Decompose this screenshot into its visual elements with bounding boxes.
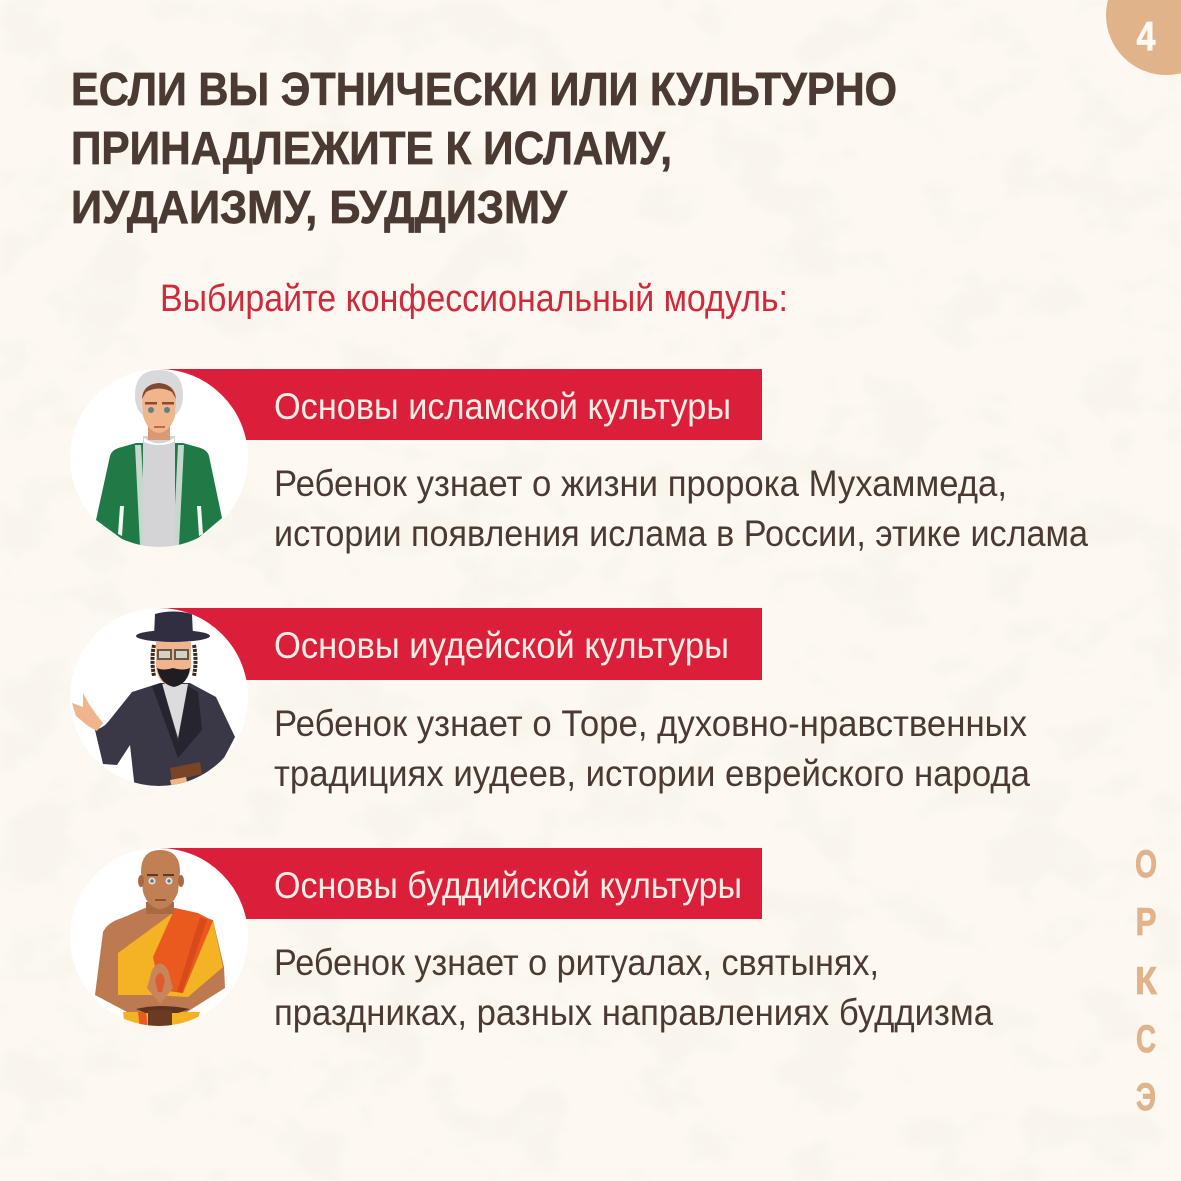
title: ПРИНАДЛЕЖИТЕ К ИСЛАМУ, (71, 122, 672, 174)
panel: islamic culture (70, 369, 1088, 554)
description: jewish culture (274, 703, 1030, 794)
heading bar: buddhist culture (160, 848, 762, 919)
description: islamic culture (274, 463, 1088, 554)
page number badge: 4 (1136, 13, 1156, 59)
heading bar: jewish culture: Основы иудейской культуры (274, 625, 729, 666)
icon: man in turban and green robe (70, 369, 248, 551)
icon: rabbi with hat and book (70, 608, 248, 790)
page number badge (1106, 0, 1181, 75)
vertical label: Р (1136, 901, 1156, 944)
icon: buddhist monk in orange robe (70, 848, 248, 1030)
title (71, 63, 897, 233)
description: jewish culture: Ребенок узнает о Торе, духовно-нравственных (274, 703, 1027, 744)
panel: jewish culture (70, 608, 1030, 794)
heading bar: islamic culture: Основы исламской культуры (274, 386, 731, 427)
heading bar: islamic culture (160, 369, 762, 440)
description: buddhist culture (274, 942, 993, 1033)
vertical label: К (1135, 960, 1157, 1003)
title: ИУДАИЗМУ, БУДДИЗМУ (71, 181, 568, 233)
heading bar: buddhist culture: Основы буддийской культуры (274, 865, 742, 906)
vertical label: С (1136, 1018, 1156, 1061)
description: jewish culture: традициях иудеев, истории еврейского народа (274, 753, 1030, 794)
description: buddhist culture: Ребенок узнает о ритуалах, святынях, (274, 942, 879, 983)
description: islamic culture: Ребенок узнает о жизни пророка Мухаммеда, (274, 463, 1007, 504)
panel: buddhist culture (70, 848, 993, 1033)
vertical label (1135, 843, 1157, 1119)
description: islamic culture: истории появления ислама в России, этике ислама (274, 513, 1088, 554)
heading bar: jewish culture (160, 608, 762, 680)
vertical label: О (1135, 843, 1157, 886)
subtitle: Выбирайте конфессиональный модуль: (160, 278, 788, 320)
description: buddhist culture: праздниках, разных направлениях буддизма (274, 992, 993, 1033)
title: ЕСЛИ ВЫ ЭТНИЧЕСКИ ИЛИ КУЛЬТУРНО (71, 63, 897, 115)
vertical label: Э (1136, 1076, 1156, 1119)
